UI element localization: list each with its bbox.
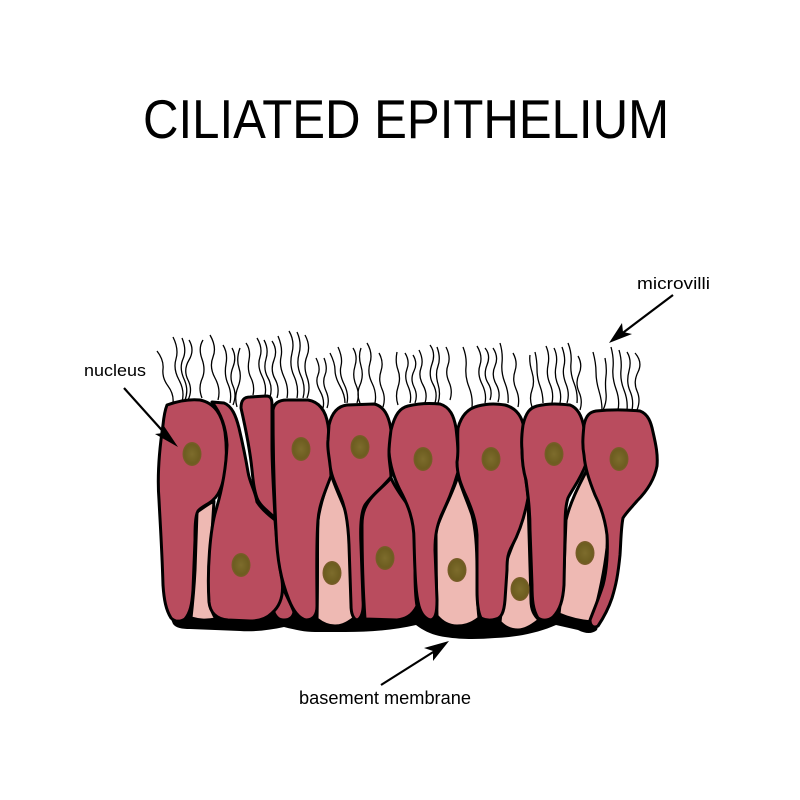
pink cell 4 with nucleus	[500, 498, 539, 630]
pink cell 2 with nucleus	[317, 474, 354, 626]
label: basement membrane: basement membrane	[299, 688, 471, 708]
small red base fragment	[273, 588, 294, 620]
arrow: basement membrane	[381, 641, 449, 685]
red cell 8 with nucleus	[457, 404, 528, 620]
red cell 4 with nucleus	[273, 400, 331, 620]
red cell 9 with nucleus	[522, 404, 586, 620]
nuclei	[182, 435, 628, 601]
cells group	[158, 396, 657, 630]
label: nucleus: nucleus	[84, 361, 146, 380]
red cell 5 with nucleus	[328, 404, 391, 620]
red cell 2 with nucleus	[208, 402, 283, 621]
pink cell 1	[191, 501, 216, 620]
arrow: nucleus	[124, 388, 178, 447]
red cell 1 with nucleus	[158, 400, 226, 621]
arrow: microvilli	[609, 295, 673, 343]
red cell 10 with nucleus	[583, 410, 657, 627]
pink cell 5 with nucleus	[559, 470, 607, 622]
basement membrane	[168, 590, 600, 639]
title: CILIATED EPITHELIUM	[143, 88, 669, 150]
red cell 7 with nucleus	[389, 403, 458, 620]
pink cell 3 with nucleus	[436, 476, 479, 626]
back red cell	[241, 396, 275, 518]
label: microvilli: microvilli	[637, 274, 710, 293]
red cell 6 with nucleus	[362, 478, 417, 620]
cilia: microvilli on the cell tops	[157, 331, 640, 410]
